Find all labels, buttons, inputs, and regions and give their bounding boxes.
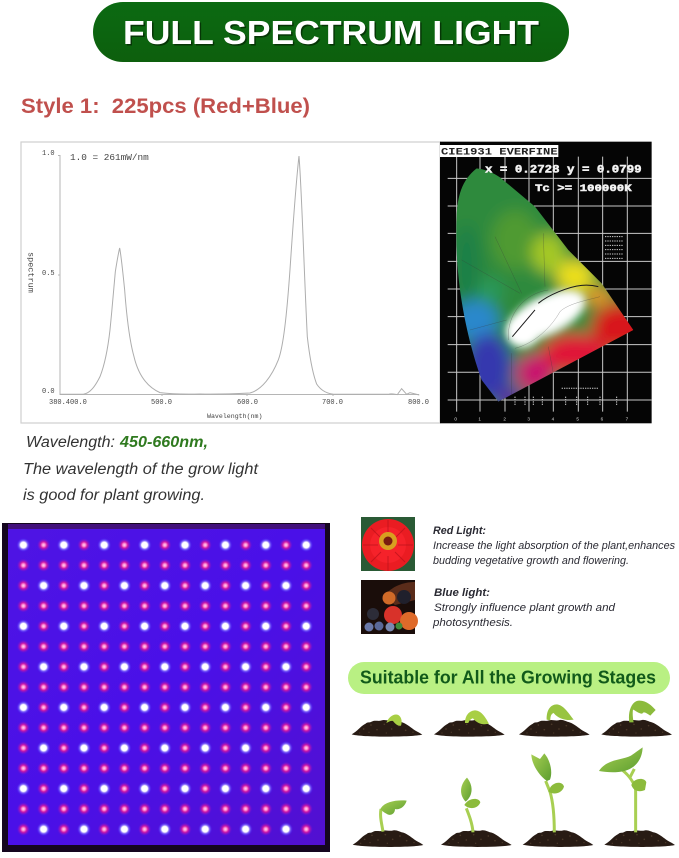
- axis labels: Wavelength(nm): [207, 413, 262, 420]
- CIE 1931 diagram: 5: [576, 417, 579, 422]
- wavelength description: The wavelength of the grow light: [23, 461, 259, 478]
- red light text: Increase the light absorption of the plant,enhances: [433, 540, 676, 552]
- title banner: FULL SPECTRUM LIGHT: [124, 16, 540, 52]
- CIE title: [440, 145, 558, 157]
- CIE 1931 diagram: 2: [503, 417, 506, 422]
- axis labels: 600.0: [237, 399, 258, 407]
- stage 2 sprout: [434, 710, 505, 737]
- stage 4 sprout: [601, 701, 672, 737]
- axis labels: 0.0: [42, 388, 55, 396]
- LED grow panel: [2, 523, 330, 852]
- wavelength description: [23, 434, 259, 504]
- axis labels: 380.400.0: [49, 399, 87, 407]
- growing stages banner: Suitable for All the Growing Stages: [360, 666, 656, 688]
- CIE 1931 diagram: CIE1931 EVERFINE: [441, 146, 558, 158]
- CIE 1931 diagram: 4: [552, 417, 555, 422]
- axis labels: 1.0 = 261mW/nm: [70, 152, 149, 163]
- colour gamut: [456, 168, 634, 402]
- CIE 1931 diagram: 7: [626, 417, 629, 422]
- red light text: budding vegetative growth and flowering.: [433, 555, 629, 567]
- blue light text: photosynthesis.: [432, 617, 513, 629]
- stage 6 seedling: [441, 778, 512, 847]
- title banner: [93, 2, 569, 62]
- blue light text: Strongly influence plant growth and: [434, 602, 616, 614]
- axis labels: 0.5: [42, 270, 55, 278]
- chromaticity readout: Tc >= 100000K: [535, 183, 633, 195]
- growing stages banner: [348, 662, 670, 694]
- wavelength description: Wavelength:: [26, 434, 115, 451]
- blue light text: Blue light:: [434, 587, 490, 599]
- blue light text: [432, 587, 616, 629]
- CIE 1931 diagram: [435, 140, 668, 423]
- stage 8 seedling: [599, 747, 675, 847]
- red light text: Red Light:: [433, 525, 486, 537]
- CIE 1931 diagram: 3: [527, 417, 530, 422]
- red light thumbnail: [361, 517, 415, 571]
- axis labels: [26, 150, 429, 420]
- chromaticity readout: x = 0.2728 y = 0.0799: [485, 164, 642, 176]
- CIE 1931 diagram: 6: [601, 417, 604, 422]
- plant growth stages: [352, 701, 675, 847]
- axis labels: 500.0: [151, 399, 172, 407]
- stage 7 seedling: [523, 753, 593, 847]
- CIE 1931 diagram: 1: [478, 417, 481, 422]
- wavelength description: 450-660nm,: [119, 434, 208, 451]
- stage 5 seedling: [353, 800, 423, 847]
- axis labels: 800.0: [408, 399, 429, 407]
- stage 3 sprout: [519, 704, 590, 737]
- red light text: [433, 525, 676, 567]
- wavelength description: is good for plant growing.: [23, 487, 205, 504]
- CIE 1931 diagram: 0: [454, 417, 457, 422]
- axis labels: 700.0: [322, 399, 343, 407]
- style heading: Style 1: 225pcs (Red+Blue): [21, 95, 310, 118]
- LED array: [13, 535, 316, 839]
- title banner: FULL SPECTRUM LIGHT: [123, 14, 539, 51]
- blue light thumbnail: [361, 580, 418, 634]
- spectrum curve: [60, 156, 419, 395]
- axis labels: 1.0: [42, 150, 55, 158]
- chromaticity readout: [485, 164, 642, 195]
- stage 1 sprout: [352, 714, 422, 737]
- axis labels: spectrum: [26, 252, 36, 293]
- chart axes: [58, 156, 419, 396]
- spectrum chart: [21, 142, 440, 423]
